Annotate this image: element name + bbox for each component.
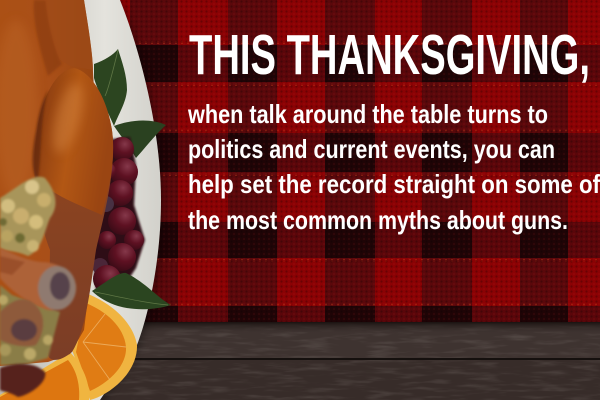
bread stuffing, lower bbox=[0, 285, 60, 366]
intro text bbox=[187, 99, 600, 235]
background: red buffalo plaid tablecloth bbox=[120, 0, 600, 322]
icon: bay leaf, lower bbox=[92, 273, 171, 309]
bread stuffing, upper bbox=[0, 177, 55, 256]
background: dark wood table bbox=[0, 322, 600, 400]
orange slice, right bbox=[72, 294, 137, 400]
icon: bay leaf, upper bbox=[94, 49, 127, 126]
icon: bunch of red grapes bbox=[92, 137, 145, 293]
turkey drumstick, upper bbox=[0, 248, 76, 310]
icon: bay leaf, middle bbox=[114, 121, 166, 158]
roast turkey body bbox=[0, 0, 100, 366]
roasted meat at the bottom bbox=[0, 364, 45, 397]
orange slice, left bbox=[0, 352, 89, 400]
white serving plate bbox=[0, 0, 163, 400]
turkey wing bbox=[32, 68, 113, 360]
turkey drumstick, lower bbox=[0, 299, 43, 346]
